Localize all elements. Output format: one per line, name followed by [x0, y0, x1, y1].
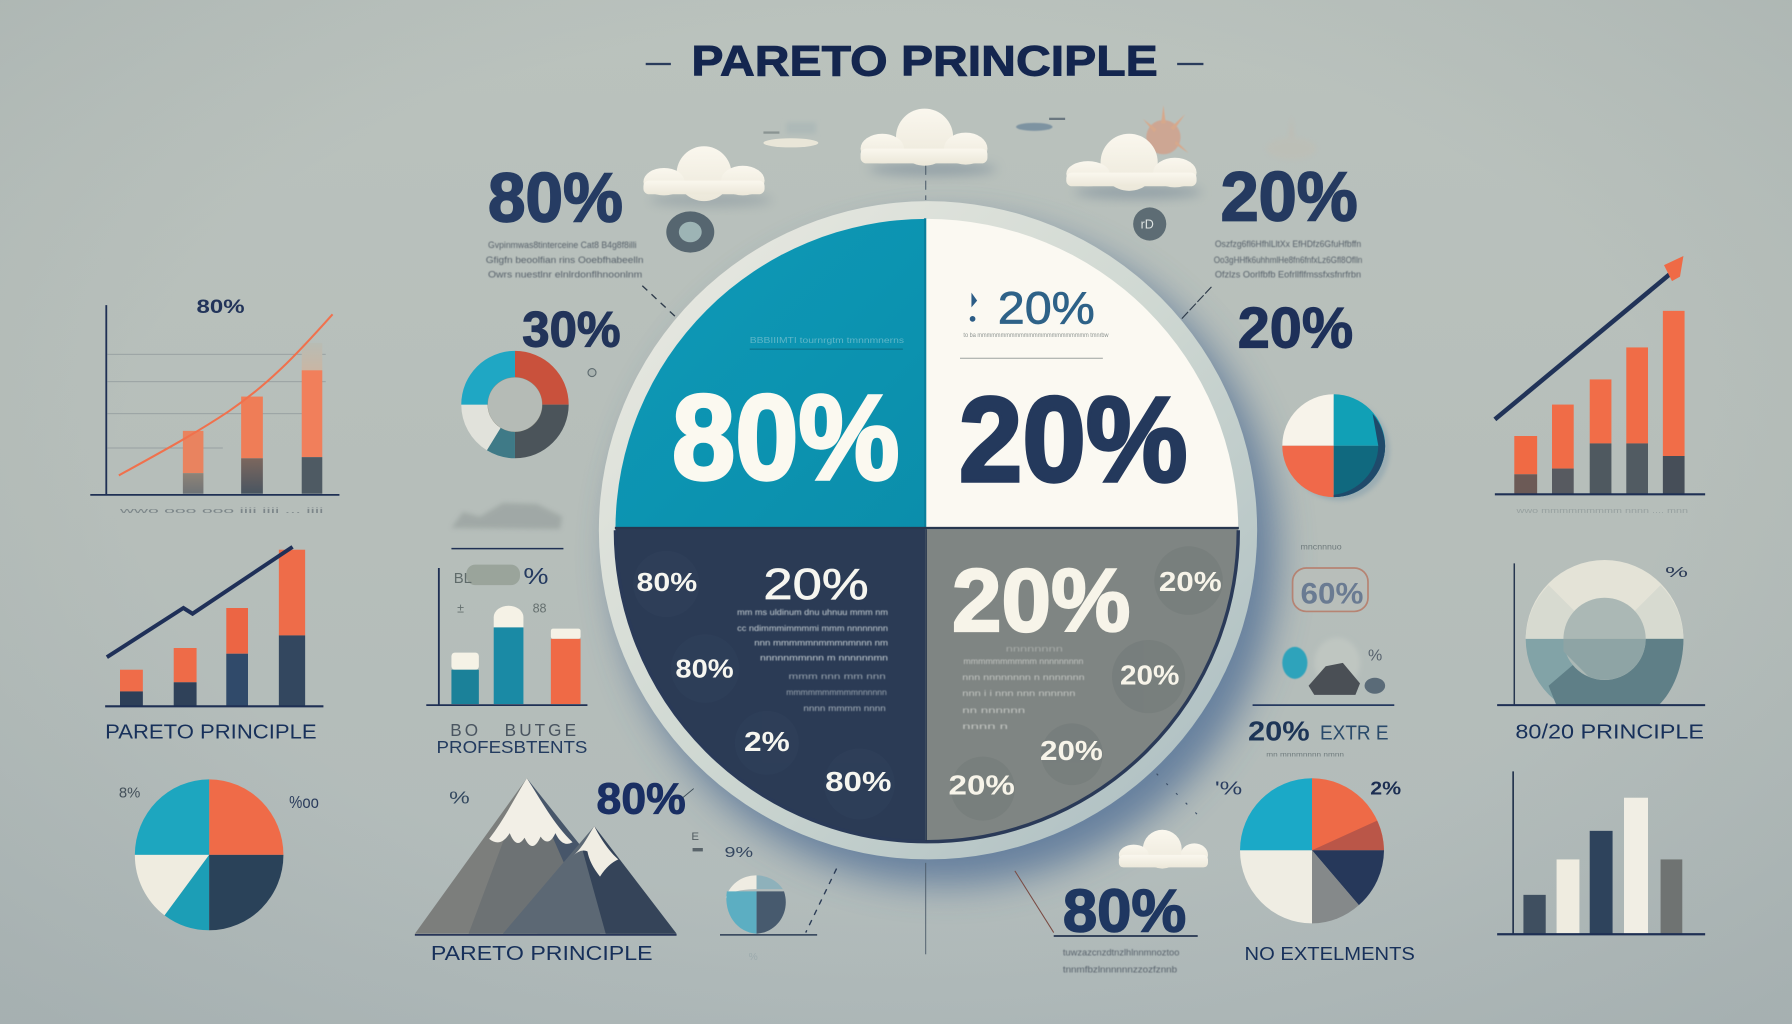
smudged pill [454, 563, 549, 616]
leader lines [642, 166, 1211, 954]
navy quadrant text lines: nnn mmmmmnmmmnmnnn nm [754, 639, 888, 648]
blurred blobs icon: % [1368, 648, 1382, 665]
quadrant: navy [606, 528, 926, 848]
bar chart: right top: wwo mmmmmmmmm nnnn .... mnn [1515, 506, 1688, 515]
bar chart: left top [90, 296, 339, 515]
pie chart: bottom left [119, 779, 319, 930]
pie chart: bottom left: 8% [119, 786, 140, 802]
label: mountain caption: PARETO PRINCIPLE [431, 943, 653, 965]
icon: round badge right: rD [1141, 218, 1154, 232]
gray quadrant text lines [962, 644, 1085, 731]
right middle callout [1248, 543, 1394, 759]
label: bottom right caption: NO EXTELMENTS [1245, 943, 1415, 964]
label: 30%: 30% [522, 300, 621, 357]
caption: 20% [1248, 716, 1310, 747]
smudged pill: % [523, 563, 549, 589]
gridlines [107, 354, 326, 448]
quadrant: gray [926, 529, 1246, 849]
faint text in teal quadrant: BBBIIIMTI tournrgtm tmnnmnerns [750, 336, 904, 345]
icon: round badge left [666, 211, 714, 253]
gray quadrant text lines: nnn nnnnnnnn n nnnnnnn [962, 673, 1085, 682]
caption: 80/20 PRINCIPLE [1515, 721, 1704, 743]
pie chart: right [1282, 394, 1390, 501]
callout: right 20%: Oo3gHHfk6uhhmlHe8fn6fnfxLz6Gfl8Oflln [1214, 255, 1362, 265]
caption: BO BUTGE [450, 720, 576, 740]
clouds [643, 109, 1208, 869]
gray quadrant text lines: nnn i i nnn nnn nnnnnn [962, 689, 1075, 698]
small marks near sphere: E [691, 831, 699, 843]
gray quadrant small labels: 20% [952, 550, 1130, 650]
cream quadrant small label: 20% [998, 282, 1095, 333]
blurred blobs icon [1282, 638, 1385, 695]
caption [437, 720, 587, 757]
cloud 3 [1066, 134, 1202, 199]
gray quadrant text lines: nnnn n [962, 722, 1008, 731]
caption: PROFESBTENTS [437, 737, 587, 757]
gray quadrant small labels: 20% [1159, 566, 1222, 597]
axes [90, 305, 339, 495]
cloud 1 [643, 146, 773, 207]
title: PARETO PRINCIPLE [691, 37, 1158, 84]
label: 20% right: 20% [1238, 296, 1353, 360]
smudged top icons [763, 118, 1065, 147]
quadrant: 20% cream [926, 211, 1246, 528]
80% main label: 80% [672, 369, 899, 505]
bar chart: center left [426, 503, 587, 757]
dome chart: right middle: % [1665, 565, 1688, 581]
gray quadrant small labels [949, 550, 1222, 800]
gray quadrant text lines: nn nnnnnn [962, 706, 1025, 715]
callout: right 20%: 20% [1221, 158, 1358, 236]
cream quadrant small label [960, 282, 1109, 359]
navy quadrant small labels: 80% [675, 654, 734, 684]
mountain illustration [415, 778, 677, 935]
cloud 2 [861, 109, 997, 176]
faint sun [1266, 114, 1317, 160]
callout: left 80%: Gfigfn beoolfian rins Ooebfhabeelln [486, 255, 643, 265]
bubbles gray [951, 546, 1223, 821]
icon: round badge right [1133, 207, 1166, 241]
cloud 4 [1119, 830, 1208, 869]
label: 80% near mountain: 80% [597, 776, 686, 824]
pie chart: bottom right: 2% [1370, 777, 1401, 798]
navy quadrant small labels [637, 561, 891, 797]
pie chart: bottom right [1215, 777, 1401, 923]
navy quadrant text lines: nnnnnmmnnn m nnnnnnmn [760, 654, 888, 663]
navy quadrant small labels: 2% [744, 726, 790, 757]
caption: EXTR E [1320, 721, 1389, 744]
navy quadrant small labels: 80% [637, 567, 697, 597]
smudged icon [451, 503, 562, 529]
navy quadrant text lines: cc ndimmmimmmmi mmm nnnnnnnn [737, 624, 888, 633]
navy quadrant text lines: mmmmmmmmmmnnnnnn [786, 688, 887, 697]
label: 80% bottom: 80% [1063, 876, 1186, 944]
small dot icon [588, 369, 596, 377]
navy quadrant text lines: mm ms uldinum dnu uhnuu mmm nm [737, 608, 888, 617]
bubbles navy [633, 551, 895, 819]
navy quadrant text lines: nnnn mmmm nnnn [803, 704, 886, 713]
badge [1293, 568, 1368, 611]
callout: left 80%: Owrs nuestlnr elnlrdonflhnoonlnm [488, 270, 642, 280]
gray quadrant small labels: 20% [1040, 735, 1103, 766]
gray quadrant text lines: mmmmmmmmmm nnnnnnnnn [963, 657, 1083, 666]
badge: 60% [1301, 577, 1363, 610]
center split [615, 218, 1239, 841]
label: 80% bottom [1054, 876, 1198, 975]
bar chart: bottom right [1497, 771, 1705, 934]
label: 80% bottom: tuwzazcnzdtnzlhlnnmnoztoo [1063, 947, 1179, 957]
sun behind cloud [1143, 105, 1189, 154]
callout: left 80%: 80% [488, 159, 623, 237]
arrow [1495, 256, 1683, 419]
sphere chart [720, 875, 817, 935]
label: 80% [197, 296, 245, 318]
heading rule [451, 548, 563, 550]
smudged pill: ± [457, 602, 464, 616]
axis ticks: wwo ooo ooo iiii iiii ... iiii [117, 506, 324, 515]
lower inner edge [615, 530, 1238, 842]
callout: left 80% [486, 159, 643, 280]
outer ring [599, 201, 1257, 859]
cream quadrant small label: to ba mmmmmmmmmmmmmmmmmmmmmmmm tmnrbw [963, 332, 1109, 339]
20% main label: 20% [959, 371, 1187, 507]
faint caption near sphere: % [749, 952, 758, 963]
dome chart: right middle [1497, 560, 1705, 743]
label: 80% bottom: tnnmfbzlnnnnnnzzozfznnb [1063, 965, 1177, 975]
callout: right 20% [1214, 158, 1362, 280]
smudged pill: BL [454, 571, 472, 587]
navy quadrant text lines: mmm nnn mm nnn [789, 672, 886, 681]
snow caps [489, 778, 573, 846]
quadrants [606, 211, 1246, 849]
gray quadrant text lines: nnnnnnnn [1006, 644, 1063, 653]
shadow behind main circle [615, 222, 1278, 885]
bar chart: left middle [105, 547, 323, 743]
mountain illustration: % [449, 787, 470, 807]
callout: right 20%: Oszfzg6fl6HfhlLltXx EfHDfz6GfuHfbffn [1215, 239, 1361, 249]
navy quadrant small labels: 80% [825, 766, 891, 797]
caption: mn mnnmnnnn nmnn [1266, 752, 1344, 759]
donut chart [461, 351, 569, 458]
callout: right 20%: Ofzlzs Oorlfbfb Eofrllflfmssfxsfnrfrbn [1215, 270, 1361, 280]
small marks near sphere [691, 831, 753, 861]
navy quadrant text lines [737, 608, 888, 713]
pie chart: bottom right: '% [1215, 777, 1242, 798]
right middle callout: mncnnnuo [1301, 543, 1342, 552]
trend line [119, 314, 333, 475]
bars [183, 343, 322, 494]
quadrant: 80% teal [606, 211, 926, 528]
smudged pill: 88 [533, 602, 547, 616]
small marks near sphere: 9% [725, 845, 753, 861]
main pie chart [599, 201, 1257, 859]
bar chart: right top [1495, 256, 1705, 515]
callout: left 80%: Gvpinmwas8tinterceine Cat8 B4g8f8illi [488, 240, 637, 250]
caption [1248, 716, 1389, 759]
caption: PARETO PRINCIPLE [105, 720, 317, 743]
gray quadrant small labels: 20% [949, 769, 1015, 800]
pie chart: bottom left: %oo [289, 792, 319, 812]
gray quadrant small labels: 20% [1120, 660, 1179, 691]
navy quadrant small labels: 20% [763, 561, 869, 609]
